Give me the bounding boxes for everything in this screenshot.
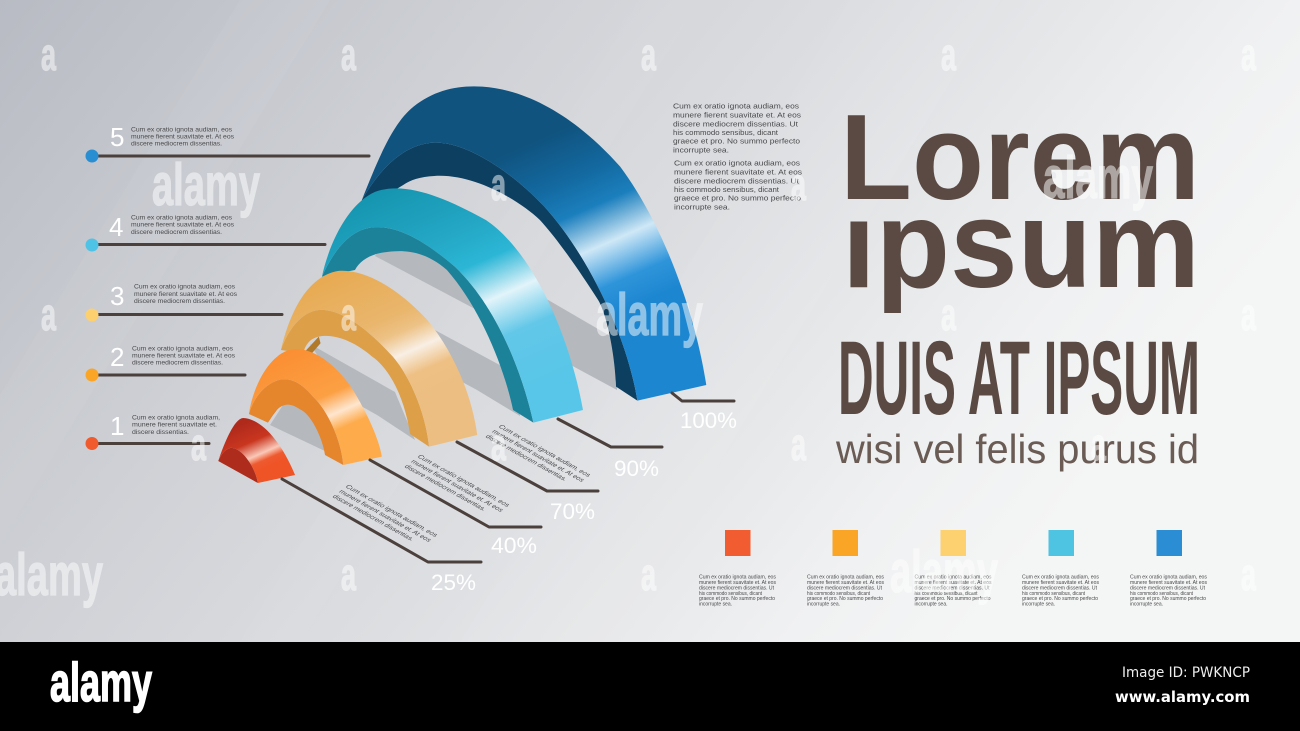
- dot 4: [86, 238, 98, 252]
- slanted caption 40%: discere mediocrem dissentias.: [402, 464, 488, 512]
- text block 4: [131, 214, 235, 236]
- paragraph top centre: incorrupte sea.: [674, 202, 730, 212]
- legend item: yellow: graece et pro. No summo perfecto: [914, 596, 991, 602]
- watermark marks: a: [941, 289, 957, 340]
- legend item: light blue: munere fierent suavitate et. At eos: [1022, 580, 1099, 586]
- text block 4: Cum ex oratio ignota audiam, eos: [131, 214, 233, 222]
- legend item: red: Cum ex oratio ignota audiam, eos: [699, 574, 777, 580]
- tagline: wisi vel felis purus id: [835, 426, 1199, 472]
- slanted caption 40%: munere fierent suavitate et. At eos: [409, 459, 505, 514]
- legend item: yellow: discere mediocrem dissentias. Ut: [914, 586, 990, 592]
- paragraph top centre: Cum ex oratio ignota audiam, eos: [673, 102, 799, 110]
- title: ipsum: ipsum: [842, 176, 1200, 314]
- legend item: orange: his commodo sensibus, dicant: [807, 591, 871, 597]
- paragraph top centre: his commodo sensibus, dicant: [673, 128, 779, 137]
- arch: 70% tan: [281, 271, 477, 447]
- legend item: light blue: [1022, 530, 1100, 608]
- legend item: red: [699, 530, 777, 608]
- paragraph top centre: discere mediocrem dissentias. Ut: [673, 120, 799, 128]
- text block 1: munere fierent suavitate et.: [132, 422, 217, 428]
- paragraph top centre: Cum ex oratio ignota audiam, eos: [674, 158, 800, 168]
- text block 2: [132, 346, 236, 366]
- percentage 90%: 90%: [614, 456, 659, 481]
- text block 5: [131, 126, 235, 148]
- paragraph top centre: incorrupte sea.: [673, 146, 729, 154]
- paragraph top centre: graece et pro. No summo perfecto: [674, 194, 801, 202]
- legend item: blue: Cum ex oratio ignota audiam, eos: [1130, 574, 1208, 580]
- footer bar: [0, 642, 1300, 731]
- dot 2: [86, 368, 98, 382]
- text block 2: Cum ex oratio ignota audiam, eos: [132, 346, 234, 352]
- arch: 40% orange: [249, 349, 382, 465]
- watermark marks: a: [641, 549, 657, 600]
- slanted caption 25%: discere mediocrem dissentias.: [330, 494, 416, 542]
- slanted caption 70%: munere fierent suavitate et. At eos: [490, 429, 586, 484]
- legend item: blue: [1130, 530, 1208, 608]
- paragraph top centre: munere fierent suavitate et. At eos: [673, 110, 801, 120]
- dot 1: [86, 437, 98, 450]
- number 4: 4: [109, 212, 123, 242]
- watermark marks: a: [641, 29, 657, 80]
- text block 1: Cum ex oratio ignota audiam,: [132, 414, 220, 422]
- text block 2: discere mediocrem dissentias.: [132, 360, 223, 366]
- legend item: light blue: his commodo sensibus, dicant: [1022, 591, 1086, 597]
- watermark marks: a: [191, 419, 207, 470]
- leader lines to percentages: [282, 393, 734, 562]
- watermark marks: a: [1241, 289, 1257, 340]
- watermark wordmarks: alamy: [596, 282, 703, 348]
- number 3: 3: [110, 281, 124, 311]
- slanted caption 40%: Cum ex oratio ignota audiam, eos: [415, 454, 512, 509]
- watermark marks: [41, 29, 1257, 600]
- text block 2: munere fierent suavitate et. At eos: [132, 352, 236, 360]
- text block 5: Cum ex oratio ignota audiam, eos: [131, 126, 233, 134]
- watermark wordmarks: alamy: [1043, 145, 1153, 211]
- legend item: blue: munere fierent suavitate et. At eos: [1130, 580, 1207, 586]
- watermark marks: a: [491, 159, 507, 210]
- site url: www.alamy.com: [1115, 688, 1250, 706]
- legend item: light blue: Cum ex oratio ignota audiam, eos: [1022, 574, 1100, 580]
- arch chart: [218, 86, 706, 483]
- legend item: orange: [807, 530, 885, 608]
- legend item: blue: discere mediocrem dissentias. Ut: [1130, 586, 1206, 592]
- text block 4: munere fierent suavitate et. At eos: [131, 222, 235, 228]
- text block 3: [134, 284, 238, 305]
- percentage 25%: 25%: [431, 570, 476, 595]
- slanted caption 25%: [330, 484, 440, 549]
- number 5: 5: [110, 122, 124, 152]
- watermark marks: a: [41, 289, 57, 340]
- legend item: light blue: incorrupte sea.: [1022, 602, 1055, 608]
- legend item: yellow: munere fierent suavitate et. At eos: [914, 580, 992, 586]
- legend item: light blue: graece et pro. No summo perfecto: [1022, 596, 1098, 602]
- paragraph top centre: discere mediocrem dissentias. Ut: [674, 176, 800, 186]
- legend item: light blue: discere mediocrem dissentias. Ut: [1022, 586, 1098, 592]
- dot 3: [86, 308, 98, 322]
- slanted caption 70%: [483, 424, 593, 489]
- watermark marks: a: [491, 419, 507, 470]
- legend item: yellow: Cum ex oratio ignota audiam, eos: [914, 574, 992, 580]
- watermark wordmarks: alamy: [890, 539, 998, 605]
- legend item: orange: graece et pro. No summo perfecto: [807, 596, 883, 602]
- legend item: orange: discere mediocrem dissentias. Ut: [807, 586, 883, 592]
- legend item: orange: incorrupte sea.: [807, 602, 840, 608]
- title: Lorem: Lorem: [840, 89, 1200, 225]
- watermark marks: a: [41, 29, 57, 80]
- watermark wordmarks: alamy: [152, 152, 260, 218]
- percentage 70%: 70%: [550, 499, 595, 524]
- text block 3: discere mediocrem dissentias.: [134, 298, 225, 305]
- text block 5: discere mediocrem dissentias.: [131, 140, 222, 148]
- number 2: 2: [110, 342, 124, 372]
- arch: 90% teal: [322, 188, 583, 423]
- legend item: yellow: incorrupte sea.: [914, 602, 948, 608]
- text block 3: Cum ex oratio ignota audiam, eos: [134, 284, 236, 290]
- legend item: red: graece et pro. No summo perfecto: [699, 596, 775, 602]
- paragraph top centre: [673, 102, 802, 212]
- number 1: 1: [110, 411, 124, 441]
- watermark marks: a: [1241, 29, 1257, 80]
- percentage 40%: 40%: [491, 533, 537, 558]
- watermark wordmarks: alamy: [0, 542, 103, 608]
- watermark marks: a: [341, 549, 357, 600]
- watermark marks: a: [791, 159, 807, 210]
- text block 3: munere fierent suavitate et. At eos: [134, 291, 238, 298]
- watermark marks: a: [791, 419, 807, 470]
- legend item: yellow: [914, 530, 992, 608]
- legend item: blue: his commodo sensibus, dicant: [1130, 591, 1194, 597]
- paragraph top centre: his commodo sensibus, dicant: [674, 185, 780, 194]
- legend item: blue: incorrupte sea.: [1130, 602, 1163, 608]
- slanted caption 40%: [402, 454, 512, 519]
- watermark marks: a: [1091, 419, 1107, 470]
- watermark marks: a: [941, 29, 957, 80]
- dot 5: [86, 150, 98, 162]
- left legend lines and dots: [92, 156, 369, 444]
- legend item: red: his commodo sensibus, dicant: [699, 591, 763, 597]
- paragraph top centre: graece et pro. No summo perfecto: [673, 136, 800, 146]
- text block 4: discere mediocrem dissentias.: [131, 229, 222, 236]
- paragraph top centre: munere fierent suavitate et. At eos: [674, 168, 802, 176]
- text block 1: [132, 414, 220, 436]
- legend item: orange: munere fierent suavitate et. At eos: [807, 580, 884, 586]
- arch: 25% red: [218, 418, 295, 483]
- legend item: yellow: his commodo sensibus, dicant: [914, 591, 978, 597]
- legend item: blue: graece et pro. No summo perfecto: [1130, 596, 1206, 602]
- watermark marks: a: [341, 289, 357, 340]
- text block 5: munere fierent suavitate et. At eos: [131, 134, 235, 140]
- legend item: red: incorrupte sea.: [699, 602, 732, 608]
- floor shadows: [270, 240, 617, 452]
- watermark wordmarks: [0, 145, 1153, 608]
- text block 1: discere dissentias.: [132, 429, 189, 436]
- arch: 100% blue: [362, 86, 706, 401]
- legend item: red: munere fierent suavitate et. At eos: [699, 580, 776, 586]
- legend item: orange: Cum ex oratio ignota audiam, eos: [807, 574, 885, 580]
- slanted caption 70%: Cum ex oratio ignota audiam, eos: [496, 424, 593, 479]
- watermark marks: a: [1241, 549, 1257, 600]
- slanted caption 70%: discere mediocrem dissentias.: [483, 434, 569, 482]
- slanted caption 25%: Cum ex oratio ignota audiam, eos: [343, 484, 440, 539]
- legend item: red: discere mediocrem dissentias. Ut: [699, 586, 775, 592]
- slanted caption 25%: munere fierent suavitate et. At eos: [337, 489, 433, 544]
- watermark marks: a: [341, 29, 357, 80]
- footer logo: alamy: [50, 651, 152, 713]
- percentage 100%: 100%: [680, 408, 737, 433]
- image id: Image ID: PWKNCP: [1122, 665, 1250, 681]
